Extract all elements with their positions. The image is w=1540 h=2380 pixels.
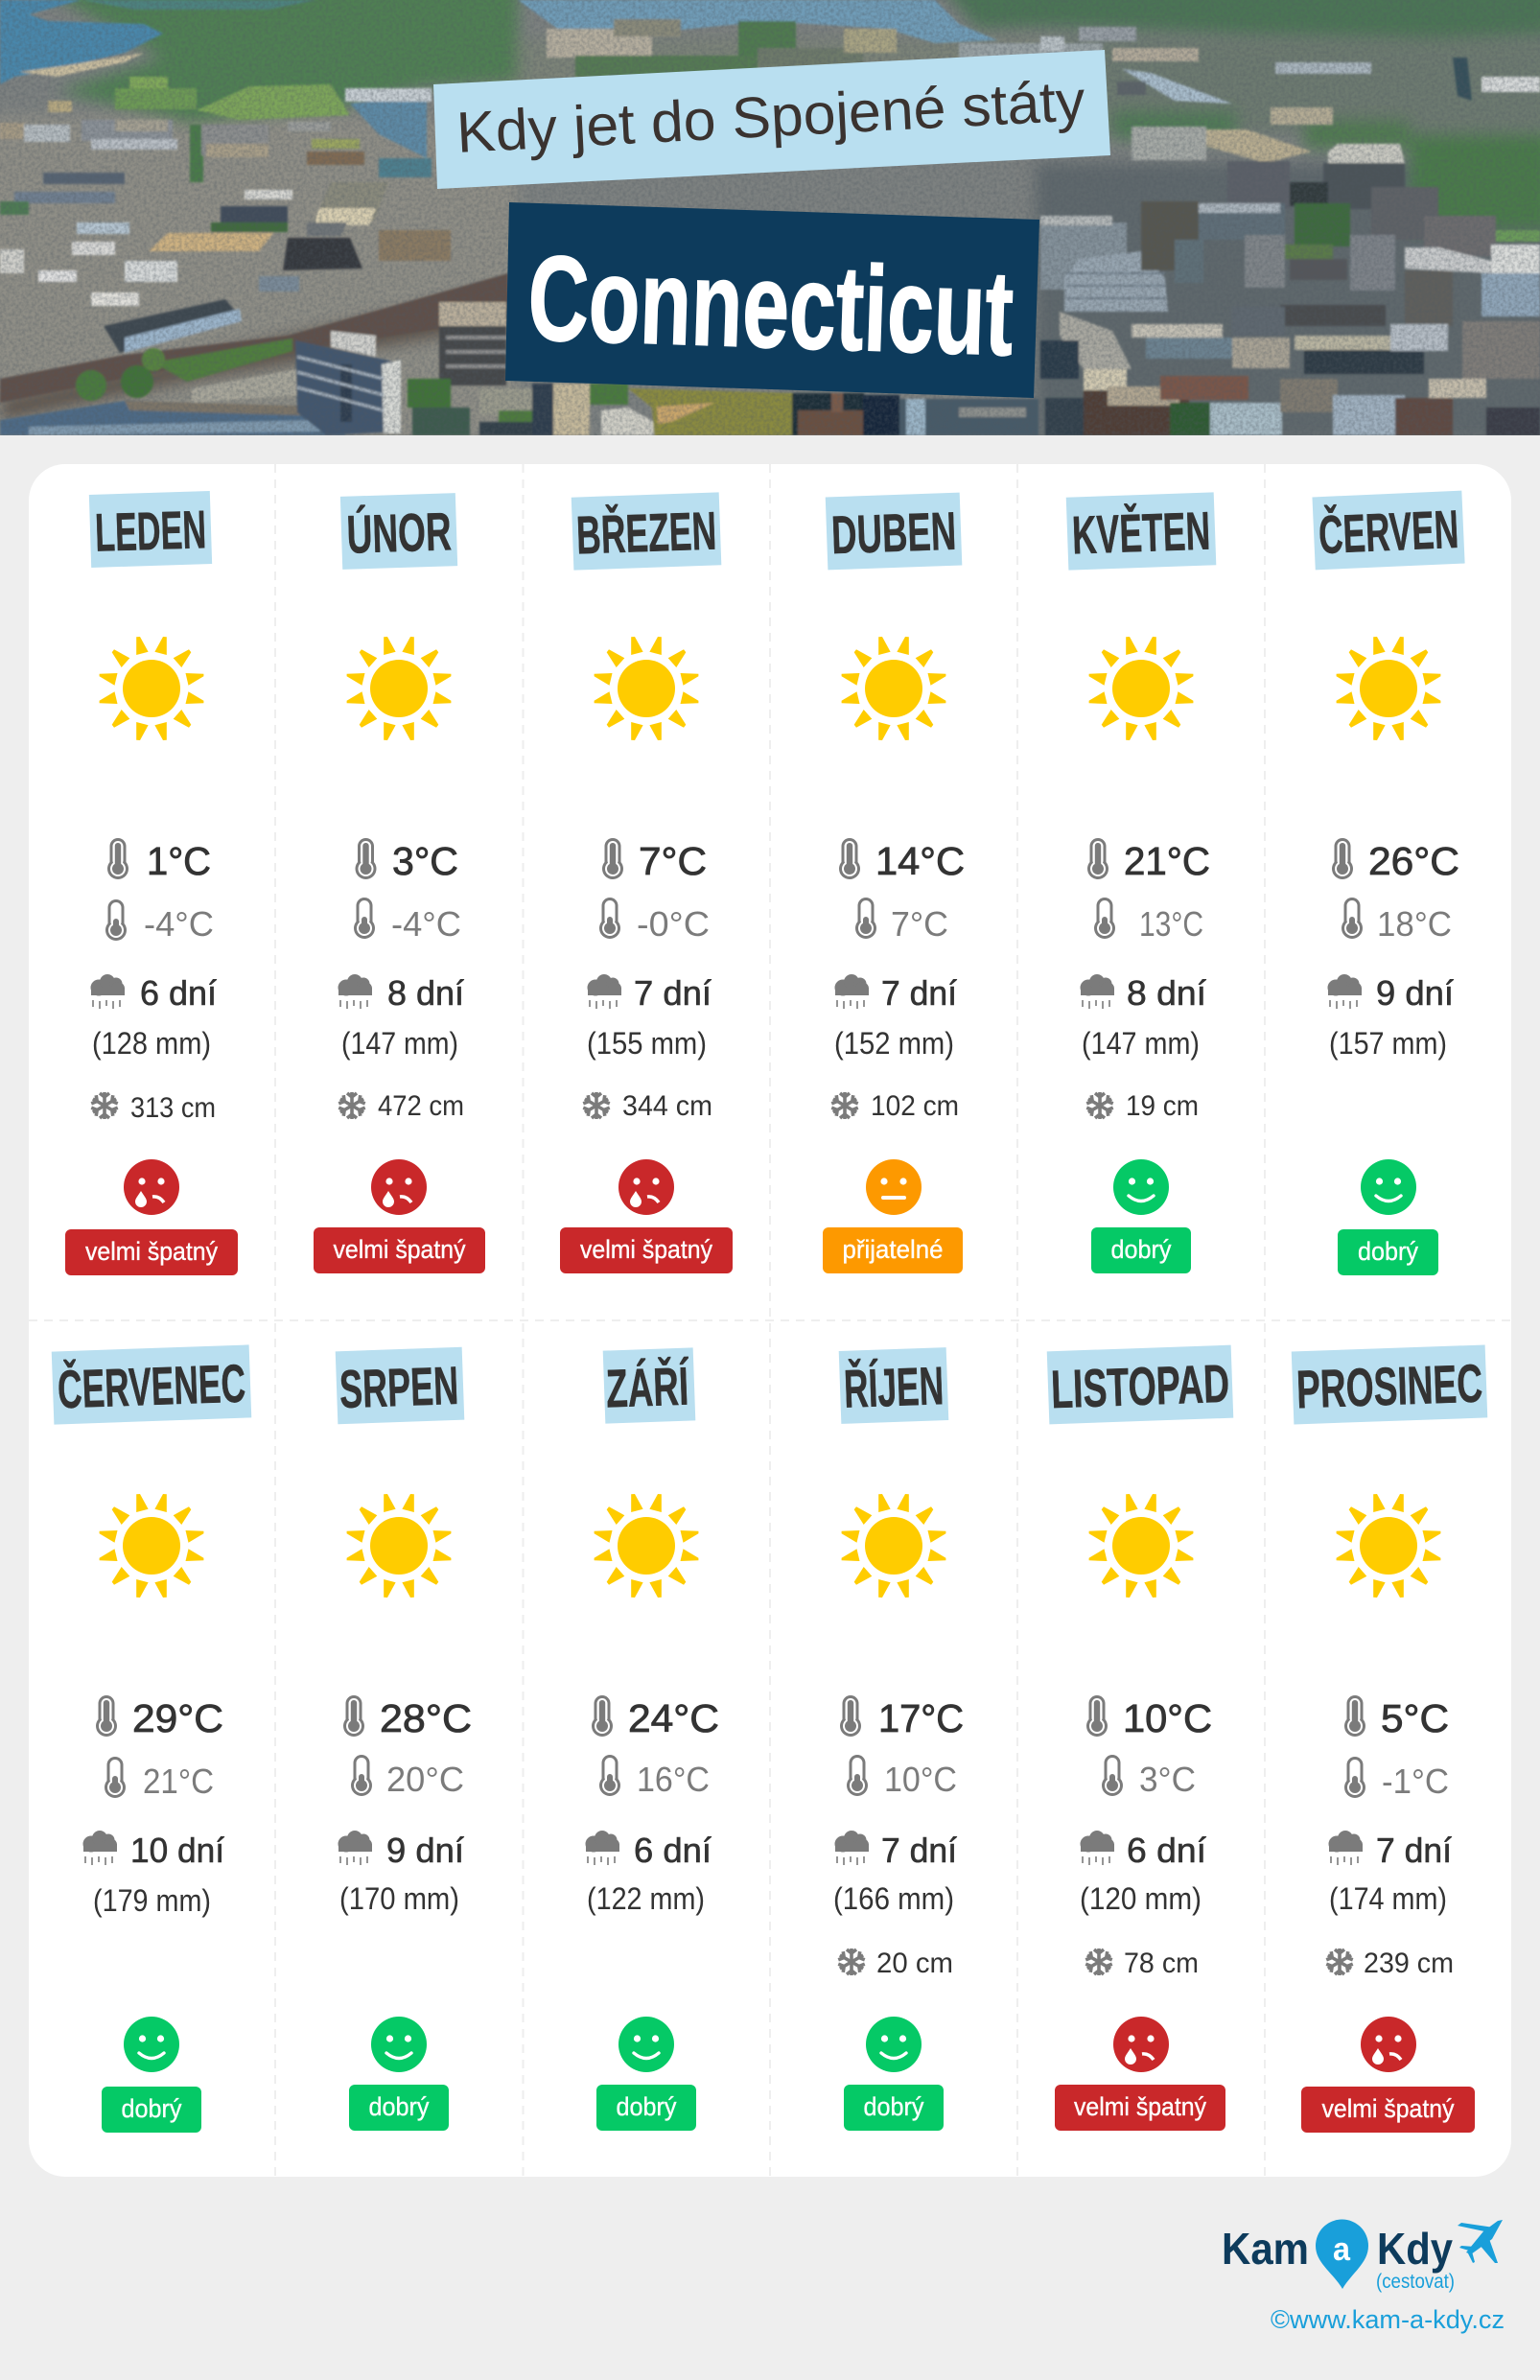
icon: sun — [100, 637, 203, 740]
rating face — [124, 1159, 179, 1215]
rainfall: (157 mm) — [1329, 1026, 1447, 1061]
heading: listopad: LISTOPAD — [1050, 1353, 1230, 1419]
rain days: 8 dní — [1127, 973, 1206, 1013]
heading: červen: ČERVEN — [1318, 499, 1459, 565]
high temperature: 10°C — [1123, 1696, 1212, 1740]
heading: září: ZÁŘÍ — [605, 1356, 690, 1419]
rain days: 6 dní — [140, 973, 217, 1013]
icon: map pin — [1316, 2219, 1368, 2289]
panel: srpen — [275, 1320, 523, 2177]
rainfall: (147 mm) — [341, 1026, 458, 1061]
heading: květen: KVĚTEN — [1071, 501, 1211, 565]
snowfall — [582, 1090, 712, 1122]
rating badge — [65, 1229, 238, 1275]
icon: sun — [100, 1494, 203, 1598]
rating face — [1113, 2017, 1169, 2072]
rain days — [338, 973, 464, 1013]
rating badge — [596, 2085, 696, 2131]
rating badge — [102, 2087, 201, 2133]
rain days: 7 dní — [881, 1831, 957, 1870]
heading: duben — [826, 493, 962, 570]
rating badge: dobrý — [1358, 1237, 1418, 1266]
rain days — [587, 973, 712, 1013]
rain days: 9 dní — [386, 1831, 464, 1870]
snowfall — [338, 1090, 464, 1122]
rainfall: (166 mm) — [833, 1881, 954, 1916]
high temperature: 17°C — [878, 1696, 964, 1740]
low temperature — [1094, 898, 1203, 944]
panel: červen — [1265, 464, 1511, 1320]
icon: sun — [1089, 1494, 1193, 1598]
rating badge — [349, 2085, 449, 2131]
snowfall: 472 cm — [378, 1090, 464, 1122]
rain days — [1329, 1831, 1452, 1870]
low temperature: -4°C — [144, 904, 214, 944]
low temperature — [599, 1755, 710, 1799]
icon: airplane — [1458, 2220, 1503, 2263]
icon: sun — [842, 637, 945, 740]
heading: duben: DUBEN — [830, 501, 957, 565]
rating face — [1361, 2017, 1416, 2072]
low temperature: 16°C — [637, 1760, 710, 1799]
low temperature: 21°C — [143, 1762, 214, 1801]
rating face — [618, 1159, 674, 1215]
rain days: 10 dní — [130, 1831, 224, 1870]
snowfall: 20 cm — [876, 1948, 953, 1979]
panel: listopad — [1017, 1320, 1265, 2177]
snowfall — [1325, 1948, 1454, 1979]
rating badge — [1338, 1229, 1438, 1275]
rating badge: dobrý — [368, 2092, 430, 2121]
rainfall: (122 mm) — [587, 1881, 705, 1916]
heading: říjen: ŘÍJEN — [843, 1355, 945, 1419]
rating badge: dobrý — [1110, 1235, 1172, 1264]
icon: sun — [1337, 1494, 1440, 1598]
high temperature — [839, 838, 965, 883]
panel: květen — [1017, 464, 1265, 1320]
rating face — [866, 1159, 922, 1215]
rating badge: velmi špatný — [580, 1235, 712, 1264]
low temperature: 18°C — [1377, 904, 1452, 944]
panel: září — [523, 1320, 770, 2177]
rain days: 6 dní — [1127, 1831, 1206, 1870]
rain days: 9 dní — [1376, 973, 1454, 1013]
rain days — [1327, 973, 1454, 1013]
rainfall: (152 mm) — [834, 1026, 954, 1061]
rain days — [338, 1831, 464, 1870]
icon: sun — [842, 1494, 945, 1598]
rating badge: dobrý — [121, 2094, 182, 2123]
heading: srpen — [336, 1347, 464, 1424]
high temperature — [840, 1695, 964, 1740]
rain days — [90, 973, 217, 1013]
icon: sun — [1337, 637, 1440, 740]
rating badge — [1091, 1227, 1191, 1273]
logo: Kam a Kdy: Kdy — [1377, 2224, 1453, 2274]
icon: sun — [347, 637, 451, 740]
panel: únor — [275, 464, 523, 1320]
rating badge: přijatelné — [842, 1235, 944, 1264]
rating face — [866, 2017, 922, 2072]
rating badge — [1301, 2087, 1475, 2133]
high temperature: 21°C — [1124, 839, 1210, 883]
title banner: Connecticut — [505, 202, 1039, 398]
logo: Kam a Kdy: Kam — [1222, 2224, 1309, 2274]
snowfall — [837, 1948, 953, 1979]
snowfall: 102 cm — [871, 1090, 959, 1122]
rating face — [371, 2017, 427, 2072]
high temperature — [343, 1695, 472, 1740]
heading: leden — [89, 491, 212, 568]
rating badge — [844, 2085, 944, 2131]
snowfall: 239 cm — [1364, 1948, 1454, 1979]
high temperature: 29°C — [132, 1696, 223, 1740]
rating badge: velmi špatný — [1074, 2092, 1206, 2121]
snowfall: 78 cm — [1124, 1948, 1199, 1979]
heading: únor: ÚNOR — [346, 501, 453, 565]
high temperature — [1086, 1695, 1212, 1740]
high temperature — [107, 838, 211, 883]
snowfall: 344 cm — [622, 1090, 712, 1122]
snowfall: 19 cm — [1126, 1090, 1199, 1122]
low temperature — [599, 898, 710, 944]
rainfall: (179 mm) — [93, 1883, 211, 1918]
low temperature: 3°C — [1139, 1760, 1196, 1799]
heading: leden: LEDEN — [94, 499, 207, 563]
icon: sun — [1089, 637, 1193, 740]
rain days: 6 dní — [634, 1831, 712, 1870]
rain days: 8 dní — [387, 973, 464, 1013]
rain days — [1080, 973, 1206, 1013]
rainfall: (120 mm) — [1080, 1881, 1202, 1916]
heading: listopad — [1047, 1345, 1233, 1424]
high temperature: 24°C — [628, 1696, 719, 1740]
rating badge: velmi špatný — [85, 1237, 218, 1266]
low temperature — [855, 898, 948, 944]
title banner: Connecticut: Connecticut — [526, 230, 1015, 381]
rating face — [124, 2017, 179, 2072]
snowfall: 313 cm — [130, 1092, 216, 1124]
high temperature — [602, 838, 707, 883]
rainfall: (170 mm) — [339, 1881, 459, 1916]
high temperature: 7°C — [639, 839, 707, 883]
rain days: 7 dní — [1376, 1831, 1452, 1870]
high temperature — [355, 838, 458, 883]
high temperature: 14°C — [875, 839, 965, 883]
rating badge: velmi špatný — [1321, 2094, 1455, 2123]
white card with twelve months — [29, 464, 1511, 2177]
snowfall — [830, 1090, 959, 1122]
rain days: 7 dní — [634, 973, 712, 1013]
snowfall — [90, 1092, 216, 1124]
panel: březen — [523, 464, 770, 1320]
panel: červenec — [29, 1320, 275, 2177]
heading: červenec — [52, 1344, 251, 1425]
low temperature: -0°C — [637, 904, 710, 944]
rating face — [618, 2017, 674, 2072]
rainfall: (155 mm) — [587, 1026, 707, 1061]
low temperature — [1344, 1757, 1449, 1801]
rating badge: dobrý — [616, 2092, 677, 2121]
rainfall: (174 mm) — [1329, 1881, 1447, 1916]
panel: říjen — [770, 1320, 1017, 2177]
heading: březen: BŘEZEN — [575, 500, 717, 566]
heading: říjen — [839, 1347, 948, 1424]
low temperature — [105, 1757, 214, 1801]
low temperature: -4°C — [391, 904, 461, 944]
rating face — [1361, 1159, 1416, 1215]
high temperature — [96, 1695, 223, 1740]
logo: Kam a Kdy — [1222, 2219, 1503, 2293]
rating badge: velmi špatný — [334, 1235, 466, 1264]
rainfall: (128 mm) — [92, 1026, 211, 1061]
low temperature — [105, 899, 214, 944]
low temperature: 7°C — [891, 904, 948, 944]
high temperature: 1°C — [147, 839, 211, 883]
heading: prosinec — [1292, 1344, 1487, 1424]
logo: Kam a Kdy: (cestovat) — [1376, 2271, 1455, 2293]
rating face — [1113, 1159, 1169, 1215]
low temperature — [351, 1755, 464, 1799]
heading: únor — [340, 493, 457, 570]
rating badge — [560, 1227, 733, 1273]
high temperature: 28°C — [380, 1696, 472, 1740]
low temperature: -1°C — [1382, 1762, 1449, 1801]
icon: sun — [595, 1494, 698, 1598]
rain days — [1080, 1831, 1206, 1870]
title banner: Kdy jet do Spojené státy: Kdy jet do Spojené státy — [455, 68, 1086, 165]
rain days: 7 dní — [881, 973, 957, 1013]
heading: září — [603, 1347, 695, 1424]
high temperature — [1332, 838, 1459, 883]
rain days — [585, 1831, 712, 1870]
rainfall: (147 mm) — [1082, 1026, 1200, 1061]
title banner: Kdy jet do Spojené státy — [433, 50, 1110, 189]
low temperature — [354, 898, 461, 944]
snowfall — [1085, 1090, 1199, 1122]
high temperature: 5°C — [1381, 1696, 1449, 1740]
high temperature: 3°C — [392, 839, 458, 883]
rain days — [82, 1831, 224, 1870]
snowfall — [1085, 1948, 1199, 1979]
rating face — [371, 1159, 427, 1215]
website credit: ©www.kam-a-kdy.cz — [1271, 2305, 1505, 2334]
heading: březen — [572, 492, 721, 571]
icon: map pin: a — [1333, 2231, 1351, 2268]
low temperature — [1102, 1755, 1196, 1799]
high temperature — [1344, 1695, 1449, 1740]
rating badge — [823, 1227, 963, 1273]
rain days — [834, 1831, 957, 1870]
heading: červenec: ČERVENEC — [57, 1353, 246, 1419]
heading: červen — [1312, 491, 1465, 570]
rain days — [834, 973, 957, 1013]
rating badge: dobrý — [863, 2092, 924, 2121]
panel: leden — [29, 464, 275, 1320]
high temperature — [592, 1695, 719, 1740]
icon: sun — [595, 637, 698, 740]
low temperature — [1342, 898, 1452, 944]
high temperature — [1087, 838, 1210, 883]
low temperature: 10°C — [884, 1760, 957, 1799]
low temperature: 13°C — [1139, 904, 1203, 944]
panel: prosinec — [1265, 1320, 1511, 2177]
icon: sun — [347, 1494, 451, 1598]
rating badge — [314, 1227, 485, 1273]
high temperature: 26°C — [1368, 839, 1459, 883]
heading: květen — [1066, 492, 1216, 571]
heading: srpen: SRPEN — [338, 1355, 459, 1419]
panel: duben — [770, 464, 1017, 1320]
header aerial photo of Connecticut city — [0, 0, 1540, 441]
low temperature: 20°C — [386, 1760, 464, 1799]
rating badge — [1055, 2085, 1225, 2131]
low temperature — [847, 1755, 957, 1799]
